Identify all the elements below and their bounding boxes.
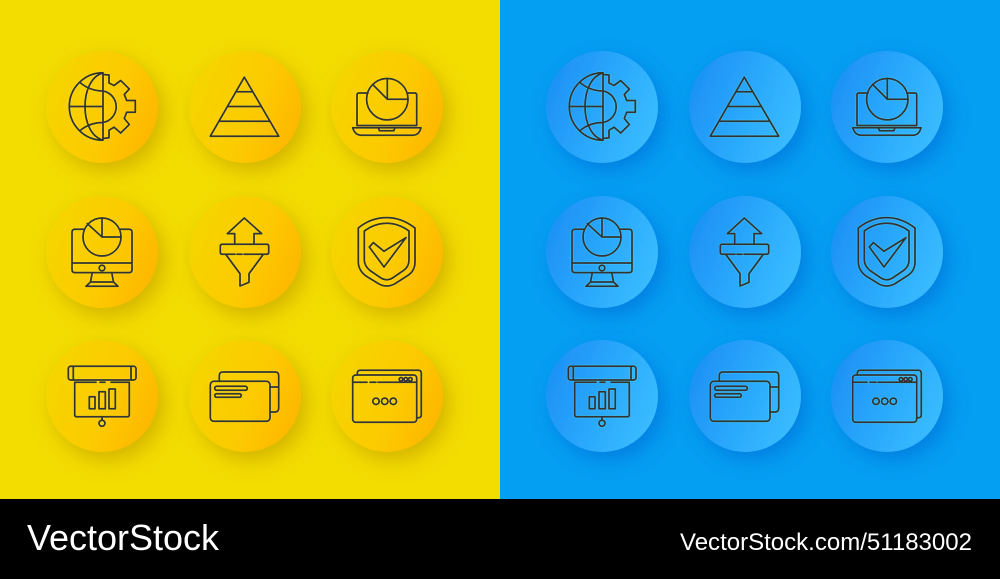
icon: browser windows on blue <box>831 340 943 452</box>
panel: yellow background <box>0 0 500 499</box>
icon: projector screen on blue <box>546 340 658 452</box>
panel: blue background <box>500 0 1000 499</box>
icon: funnel with arrow on blue <box>689 196 801 308</box>
icon: monitor pie chart on yellow <box>46 196 158 308</box>
icon: pyramid on yellow <box>189 51 301 163</box>
icon: monitor pie chart on blue <box>546 196 658 308</box>
icon: laptop pie chart on blue <box>831 51 943 163</box>
icon: pyramid on blue <box>689 51 801 163</box>
icon: laptop pie chart on yellow <box>331 51 443 163</box>
icon: browser windows on yellow <box>331 340 443 452</box>
icon: globe with gear on blue <box>546 51 658 163</box>
icon: shield with check on yellow <box>331 196 443 308</box>
footer bar <box>0 499 1000 579</box>
footer logo text: VectorStock <box>27 517 220 558</box>
icon: cards on blue <box>689 340 801 452</box>
icon: cards on yellow <box>189 340 301 452</box>
icon: projector screen on yellow <box>46 340 158 452</box>
icon: globe with gear on yellow <box>46 51 158 163</box>
icon: shield with check on blue <box>831 196 943 308</box>
footer image id text: VectorStock.com/51183002 <box>680 529 972 556</box>
icon: funnel with arrow on yellow <box>189 196 301 308</box>
